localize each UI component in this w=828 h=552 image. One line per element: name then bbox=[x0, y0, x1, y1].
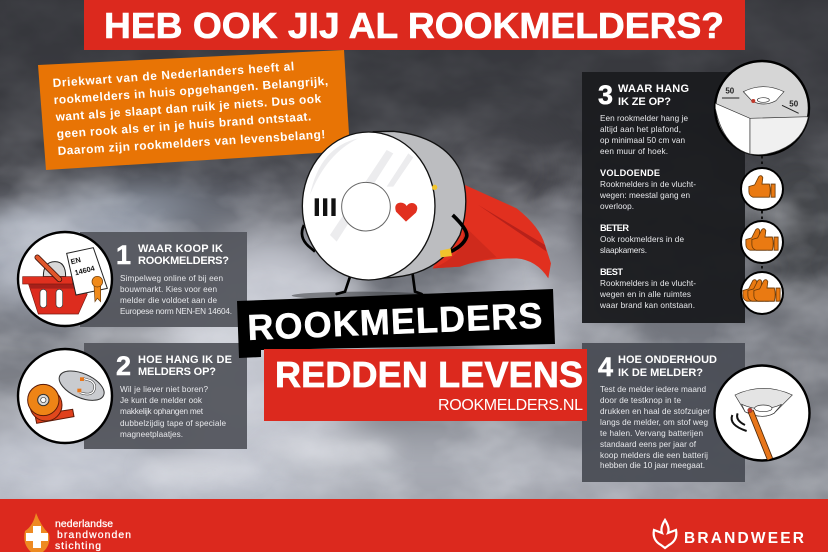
legs bbox=[337, 272, 422, 294]
heading 2: HOE HANG IK DE bbox=[138, 354, 232, 366]
best bbox=[599, 267, 696, 310]
best: BEST bbox=[600, 267, 623, 277]
panel 4: hoe onderhoud ik de melder bbox=[582, 343, 745, 482]
beter bbox=[600, 223, 684, 255]
text 1: Europese norm NEN-EN 14604. bbox=[120, 307, 232, 316]
slogan banner black: ROOKMELDERS bbox=[247, 295, 543, 348]
icon: basket and certificate: EN bbox=[70, 255, 82, 266]
text 2 bbox=[120, 385, 226, 439]
dotted connector bbox=[761, 156, 763, 275]
logo: nederlandse brandwonden stichting: stichting bbox=[55, 541, 101, 552]
icon: basket and certificate bbox=[18, 232, 112, 326]
intro orange callout: Daarom zijn rookmelders van levensbelang! bbox=[57, 127, 326, 158]
text 1 bbox=[120, 274, 232, 316]
logo: nederlandse brandwonden stichting bbox=[24, 513, 131, 552]
bars bbox=[315, 198, 336, 216]
icon: ceiling detector with 50 cm distances: 50 bbox=[789, 100, 799, 109]
text 2: Je kunt de melder ook bbox=[120, 396, 203, 405]
text 1: Simpelweg online of bij een bbox=[120, 274, 223, 283]
smoke detector superhero mascot bbox=[292, 131, 551, 300]
wristband bbox=[440, 248, 452, 257]
heading 1 bbox=[138, 243, 229, 267]
left arm bbox=[302, 225, 315, 252]
beter: BETER bbox=[600, 223, 629, 233]
heading 3: WAAR HANG bbox=[618, 83, 689, 95]
text 2: makkelijk ophangen met bbox=[120, 407, 204, 416]
voldoende: VOLDOENDE bbox=[600, 168, 660, 178]
voldoende bbox=[599, 168, 696, 211]
intro orange callout: want als je slaapt dan ruik je niets. Dus ook bbox=[54, 91, 322, 124]
text 4: standaard eens per jaar of bbox=[600, 440, 697, 449]
number 4: 4 bbox=[598, 352, 613, 382]
body bbox=[370, 131, 466, 279]
text 2: magneetplaatjes. bbox=[120, 430, 183, 439]
text 3 intro: een muur of hoek. bbox=[600, 147, 668, 156]
text 2: Wil je liever niet boren? bbox=[120, 385, 208, 394]
heading 1: ROOKMELDERS? bbox=[138, 255, 229, 267]
heading 4: IK DE MELDER? bbox=[618, 367, 703, 379]
panel 2: hoe hang ik de melders op bbox=[84, 343, 247, 449]
intro orange callout: rookmelders in huis opgehangen. Belangrijk, bbox=[53, 74, 329, 107]
heading 3 bbox=[618, 83, 689, 108]
intro orange callout: geen rook als er in je huis brand ontstaat. bbox=[56, 109, 312, 141]
icon: ceiling detector with 50 cm distances: 50 bbox=[725, 87, 735, 96]
text 2: dubbelzijdig tape of speciale bbox=[120, 419, 226, 428]
cape clasp bbox=[432, 185, 437, 190]
number 1: 1 bbox=[116, 240, 131, 270]
heading 1: WAAR KOOP IK bbox=[138, 243, 223, 255]
centre circle bbox=[342, 182, 390, 231]
icon: testing the detector bbox=[714, 366, 810, 460]
icon: ceiling detector with 50 cm distances bbox=[715, 61, 809, 155]
footer bbox=[0, 499, 828, 552]
text 3 intro: Een rookmelder hang je bbox=[600, 114, 688, 123]
logo: nederlandse brandwonden stichting: brandwonden bbox=[57, 530, 131, 541]
beter: slaapkamers. bbox=[600, 246, 647, 255]
icon: one thumb bbox=[741, 168, 783, 210]
title banner: HEB OOK JIJ AL ROOKMELDERS? bbox=[104, 5, 724, 46]
text 3 intro: op minimaal 50 cm van bbox=[600, 136, 685, 145]
slogan banner red: REDDEN LEVENS bbox=[275, 354, 583, 395]
number 2: 2 bbox=[116, 351, 131, 381]
voldoende: Rookmelders in de vlucht- bbox=[600, 180, 696, 189]
face highlights bbox=[310, 138, 413, 242]
intro orange callout bbox=[38, 50, 350, 170]
intro orange callout: Driekwart van de Nederlanders heeft al bbox=[52, 59, 295, 90]
shadow bbox=[292, 292, 435, 300]
text 4: koop melders die een batterij bbox=[600, 451, 708, 460]
text 4: te halen. Vervang batterijen bbox=[600, 429, 703, 438]
text 3 intro: altijd aan het plafond, bbox=[600, 125, 681, 134]
icon: tape and magnets bbox=[18, 349, 112, 443]
icon: three thumbs bbox=[741, 272, 783, 314]
text 4: drukken en haal de stofzuiger bbox=[600, 407, 710, 416]
best: Rookmelders in de vlucht- bbox=[600, 279, 696, 288]
slogan banner red: ROOKMELDERS.NL bbox=[438, 397, 583, 414]
panel 3: waar hang ik ze op bbox=[582, 72, 745, 323]
beter: Ook rookmelders in de bbox=[600, 235, 684, 244]
icon: basket and certificate: 14604 bbox=[74, 263, 96, 277]
logo: brandweer: BRANDWEER bbox=[684, 530, 804, 547]
text 3 intro bbox=[600, 114, 688, 156]
panel 1: waar koop ik rookmelders bbox=[80, 232, 247, 327]
text 4: Test de melder iedere maand bbox=[600, 385, 706, 394]
text 4: langs de melder, om stof weg bbox=[600, 418, 708, 427]
text 1: bouwmarkt. Kies voor een bbox=[120, 285, 217, 294]
text 4: door de testknop in te bbox=[600, 396, 681, 405]
heading 3: IK ZE OP? bbox=[618, 96, 671, 108]
icon: two thumbs bbox=[741, 221, 783, 263]
logo: nederlandse brandwonden stichting: nederlandse bbox=[55, 519, 113, 530]
best: waar brand kan ontstaan. bbox=[599, 301, 695, 310]
heading 2 bbox=[138, 354, 232, 378]
heading 2: MELDERS OP? bbox=[138, 366, 216, 378]
heart bbox=[395, 203, 417, 222]
right arm bbox=[447, 215, 467, 253]
number 3: 3 bbox=[598, 80, 613, 110]
cape bbox=[433, 185, 551, 278]
text 4 bbox=[600, 385, 710, 470]
voldoende: wegen: meestal gang en bbox=[599, 191, 690, 200]
detector face bbox=[302, 132, 435, 280]
best: wegen en in alle ruimtes bbox=[599, 290, 691, 299]
text 1: melder die voldoet aan de bbox=[120, 296, 217, 305]
slogan banner red bbox=[264, 349, 587, 421]
logo: brandweer bbox=[654, 520, 804, 548]
text 4: hebben die 10 jaar meegaat. bbox=[600, 461, 705, 470]
voldoende: overloop. bbox=[600, 202, 634, 211]
heading 4 bbox=[618, 354, 717, 379]
heading 4: HOE ONDERHOUD bbox=[618, 354, 717, 366]
